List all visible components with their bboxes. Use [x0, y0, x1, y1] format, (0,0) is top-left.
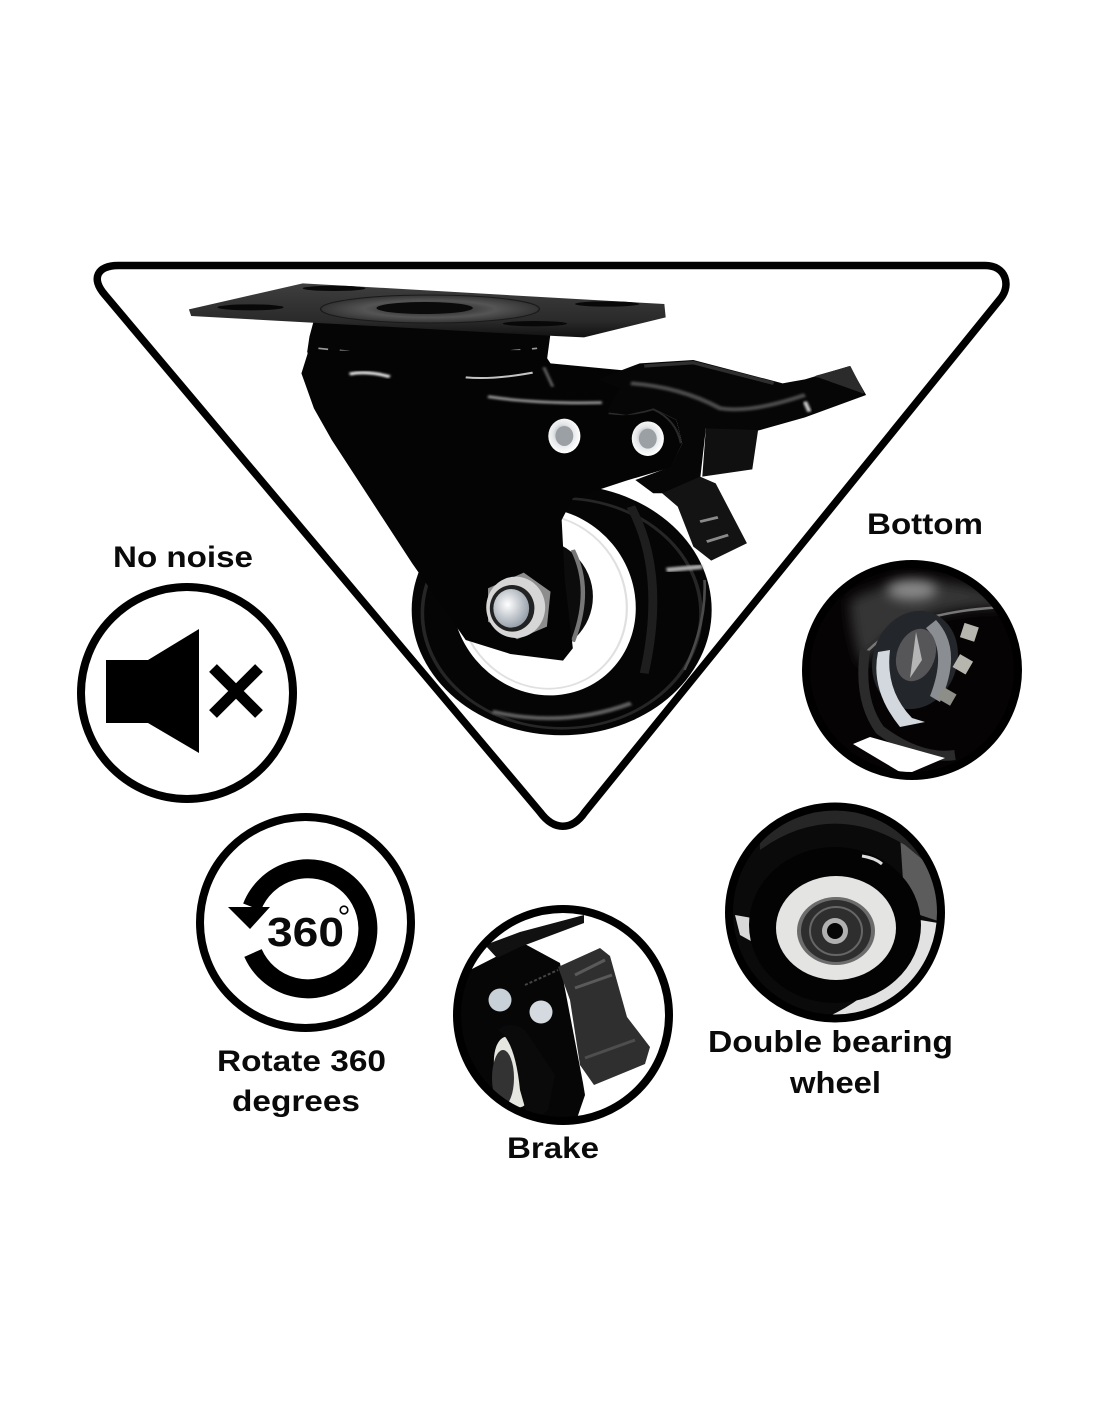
brake pedal: [597, 360, 866, 493]
icon: muted speaker: [81, 587, 293, 799]
label: Rotate 360 degrees: Rotate 360: [217, 1045, 386, 1078]
photo: double bearing wheel: [720, 800, 950, 1025]
main photo: swivel caster with brake: [189, 283, 866, 735]
label: Double bearing wheel: wheel: [789, 1065, 881, 1100]
brake shoe: [662, 477, 747, 561]
fork body: [301, 350, 682, 661]
photo: bottom view of swivel: [800, 560, 1025, 780]
label: Bottom: Bottom: [867, 508, 983, 541]
caster plate: [189, 283, 666, 337]
triangle frame: [97, 266, 1006, 826]
label: Brake: Brake: [507, 1132, 599, 1165]
icon: rotate 360: 360: [267, 909, 344, 955]
axle nut: [486, 573, 551, 639]
icon: rotate 360: [200, 817, 411, 1028]
infographic canvas: [77, 262, 1022, 1158]
label: Double bearing wheel: [708, 1024, 953, 1100]
label: Rotate 360 degrees: [217, 1045, 386, 1118]
label: Rotate 360 degrees: degrees: [232, 1085, 360, 1118]
rivets: [548, 419, 664, 456]
photo: brake close-up: [450, 900, 676, 1130]
swivel bearing: [307, 320, 551, 377]
label: Double bearing wheel: Double bearing: [708, 1024, 953, 1059]
wheel: [412, 485, 712, 735]
label: No noise: No noise: [113, 541, 253, 574]
